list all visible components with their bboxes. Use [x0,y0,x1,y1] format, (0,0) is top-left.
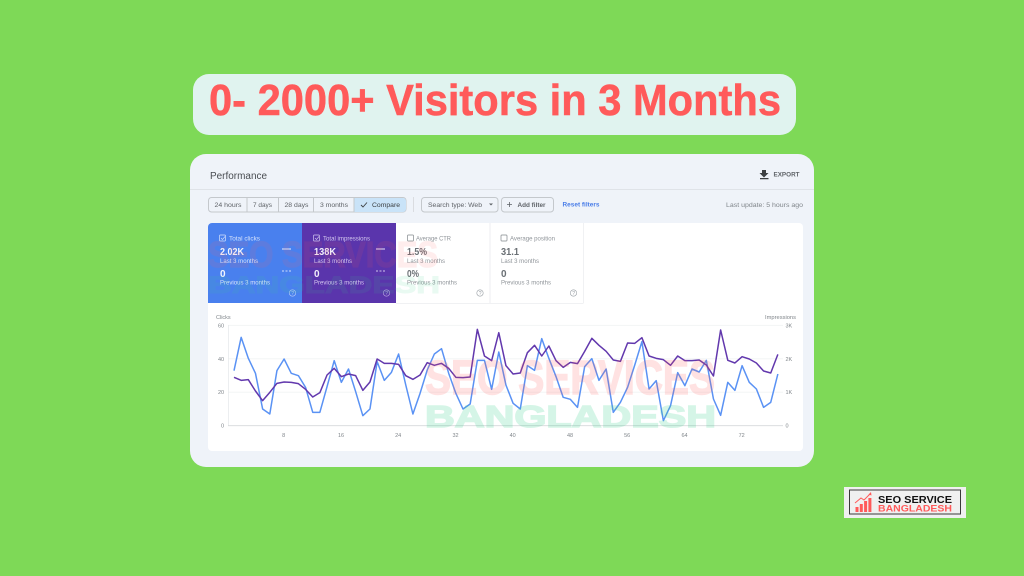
metric tile: total impressions: Total impressions [323,236,370,242]
metric tile: total clicks: 0 [220,269,226,280]
logo: SEO Service Bangladesh: BANGLADESH [878,504,952,514]
search type filter [414,197,498,212]
x axis labels: 24 [395,433,401,439]
right axis labels: Impressions [765,315,796,321]
x axis labels: 72 [739,433,745,439]
x axis labels [282,433,745,439]
right axis labels [765,315,796,430]
x axis labels: 56 [624,433,630,439]
metric tile: average position: Average position [510,236,556,242]
x axis labels: 64 [681,433,688,439]
date range filter buttons: 7 days [253,202,273,209]
x axis labels: 8 [282,433,285,439]
right axis labels: 3K [786,323,793,329]
metric tile: total clicks: Previous 3 months [220,280,270,286]
metric tile: average position: ? [572,291,575,297]
metric tile: average CTR: ? [479,291,482,297]
metric tile: total impressions: Previous 3 months [314,280,364,286]
left axis labels: 60 [218,323,224,329]
white content panel [208,223,803,451]
metric tile: average CTR [407,223,490,303]
clicks line [234,337,778,421]
line chart: clicks and impressions [216,315,796,439]
watermark: over chart: SEO SERVICES [425,352,715,405]
watermark: over metric tiles [208,234,440,299]
right axis labels: 0 [786,424,789,430]
left axis labels: 0 [221,424,224,430]
date range filter buttons: 28 days [284,202,309,209]
metric tile: average CTR: 1.5% [407,247,427,258]
metric tile: total impressions: ? [385,291,388,297]
title banner: 0- 2000+ Visitors in 3 Months [209,76,781,125]
metric tile: average CTR: Average CTR [416,236,451,242]
date range filter buttons: Compare [372,202,400,209]
watermark: over metric tiles: BANGLADESH [208,272,440,299]
watermark: over chart: BANGLADESH [425,399,716,434]
metric tile: average position: 31.1 [501,247,519,258]
metric tile: total impressions [302,223,396,303]
right axis labels: 1K [786,390,793,396]
watermark: over chart [425,352,716,434]
metric tile: total clicks [208,223,302,303]
metric tile: average position: Previous 3 months [501,280,551,286]
metric tile: total clicks: Total clicks [229,236,260,242]
add filter button: Add filter [518,202,546,209]
left axis labels [216,315,231,430]
panel: performance dashboard [190,154,814,467]
metric tile: average CTR: Previous 3 months [407,280,457,286]
metric tile: total clicks: Last 3 months [220,259,258,265]
x axis labels: 16 [338,433,344,439]
date range filter buttons [208,198,406,212]
metric tile: total clicks: ? [291,291,294,297]
logo: SEO Service Bangladesh: SEO SERVICE [878,495,952,506]
logo: SEO Service Bangladesh [844,487,966,518]
x axis labels: 32 [452,433,459,439]
metric tile: total impressions: 0 [314,269,320,280]
left axis labels: 40 [218,357,224,363]
metric tile: average position: 0 [501,269,507,280]
metric tile: average position [396,223,584,304]
x axis labels: 40 [510,433,516,439]
metric tile: average CTR: Last 3 months [407,259,445,265]
date range filter buttons: 24 hours [214,202,242,209]
last update note: Last update: 5 hours ago [726,202,803,209]
icon: rising bar chart [855,492,872,512]
add filter button [502,198,554,212]
search type filter: Search type: Web [428,202,482,209]
metric tile: total impressions: 138K [314,247,337,258]
right axis labels: 2K [786,357,793,363]
left axis labels: 20 [218,390,224,396]
export button [760,170,800,179]
left axis labels: Clicks [216,315,231,321]
export button: EXPORT [774,172,800,178]
x axis labels: 48 [567,433,573,439]
metric tile: average CTR: 0% [407,269,419,280]
date range filter buttons: 3 months [320,202,349,209]
metric tile: total impressions: Last 3 months [314,259,352,265]
reset filters link: Reset filters [562,202,600,208]
heading: Performance: Performance [210,171,267,182]
metric tile: total clicks: 2.02K [220,247,245,258]
watermark: over metric tiles: SEO SERVICES [208,234,438,275]
impressions line [234,329,778,401]
metric tile: average position: Last 3 months [501,259,539,265]
